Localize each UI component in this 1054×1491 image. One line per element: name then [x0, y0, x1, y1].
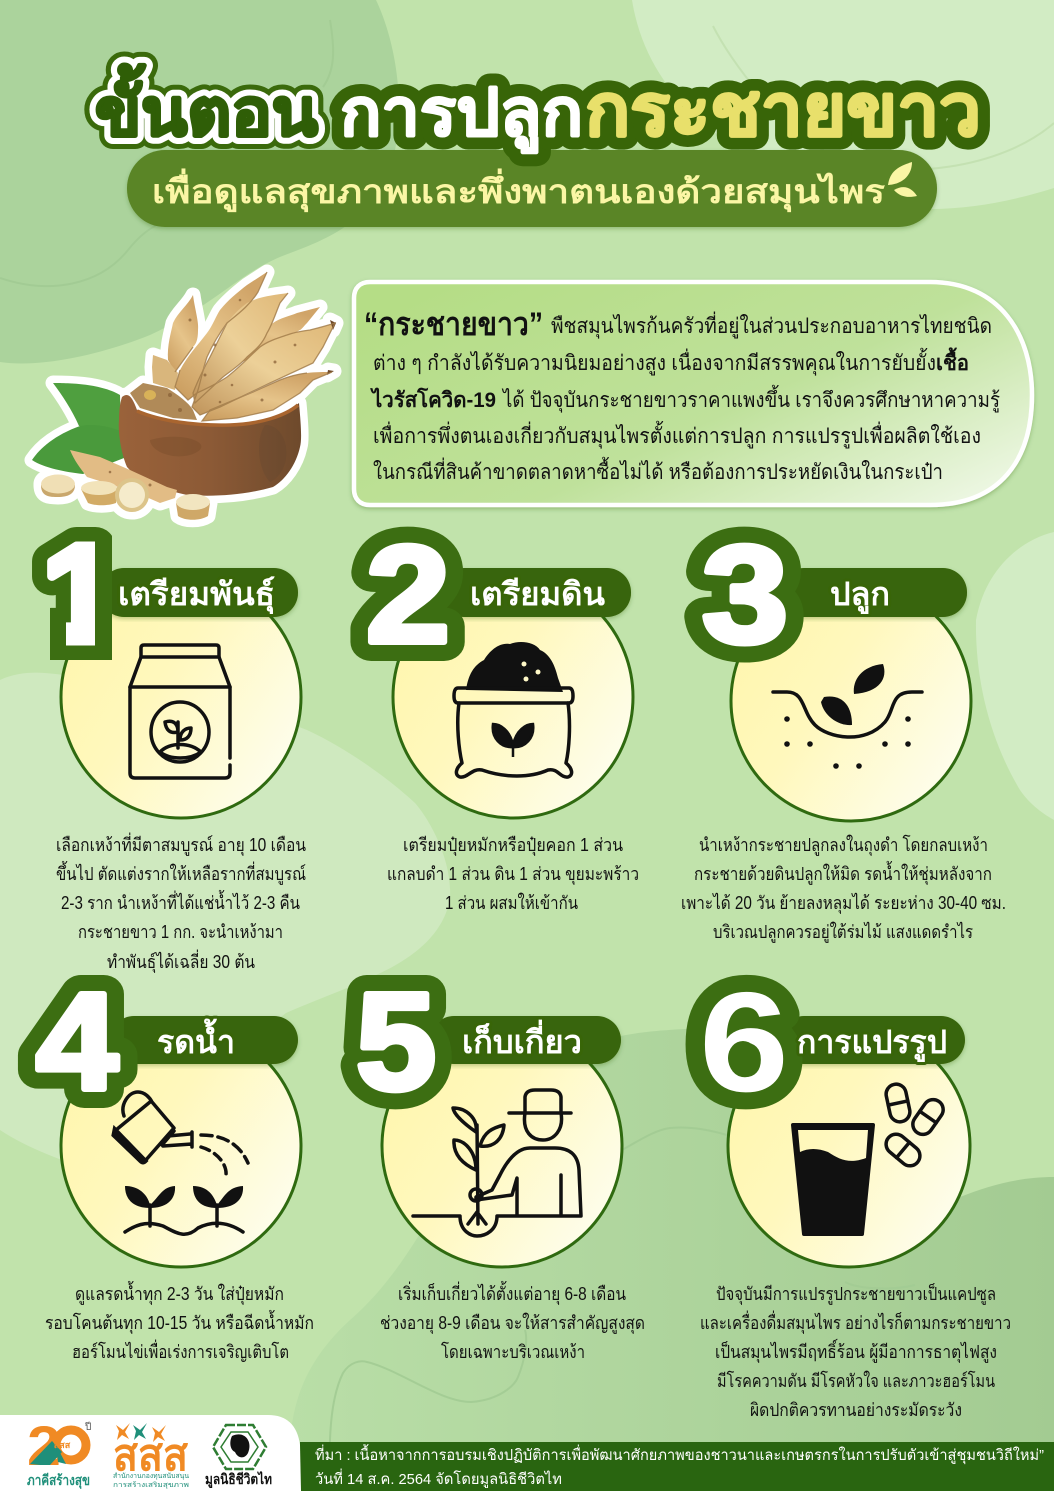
footer: source bar	[300, 1442, 1054, 1491]
body text 6: ปัจจุบันมีการแปรรูปกระชายขาวเป็นแคปซูล	[716, 1282, 996, 1305]
step 6: processing	[699, 963, 1011, 1420]
tuber speckles	[109, 299, 296, 486]
body text 6	[700, 1282, 1011, 1420]
logo: 20 years: สสส	[54, 1440, 71, 1450]
circle 1	[61, 576, 301, 818]
title word: steps: ขั้นตอน	[95, 63, 318, 149]
footer: logo panel	[0, 1414, 301, 1491]
number 4: 4	[36, 965, 118, 1119]
number 2: 2	[366, 518, 450, 672]
bar 3	[780, 568, 967, 617]
logo: 20 years	[27, 1414, 91, 1489]
bowl rim	[137, 405, 298, 425]
bar 2	[440, 568, 631, 617]
body text 4: ฮอร์โมนไข่เพื่อเร่งการเจริญเติบโต	[72, 1339, 289, 1362]
intro text line 4: เพื่อการพึ่งตนเองเกี่ยวกับสมุนไพรตั้งแต่การปลูก การแปรรูปเพื่อผลิตใช้เอง	[373, 421, 981, 449]
body text 3: นำเหง้ากระชายปลูกลงในถุงดำ โดยกลบเหง้า	[699, 834, 988, 856]
number 5: 5	[356, 965, 436, 1119]
body text 5	[380, 1281, 645, 1362]
number 2: 2	[366, 518, 450, 672]
body text 6: ผิดปกติควรทานอย่างระมัดระวัง	[750, 1400, 962, 1420]
bar 6	[780, 1016, 965, 1064]
body text 3	[681, 834, 1006, 943]
background blob: top right	[632, 0, 1054, 209]
number 1: 1	[42, 517, 122, 671]
body text 3: เพาะได้ 20 วัน ย้ายลงหลุมได้ ระยะห่าง 30-40 ซม.	[681, 892, 1006, 914]
background blob: bottom	[289, 1028, 1054, 1491]
background blob: top left	[0, 0, 399, 363]
body text 3: บริเวณปลูกควรอยู่ใต้ร่มไม้ แสงแดดรำไร	[713, 921, 973, 943]
photo: white galangal in wooden bowl	[32, 272, 336, 520]
icon: farmer holding plant	[413, 1090, 581, 1236]
subtitle pill	[127, 150, 937, 227]
bar 5	[430, 1016, 621, 1064]
body text 1: เลือกเหง้าที่มีตาสมบูรณ์ อายุ 10 เดือน	[56, 832, 306, 856]
title outline band: การปลูก	[340, 75, 583, 154]
circle 3	[731, 581, 971, 821]
circle 5	[382, 1025, 622, 1267]
icon: soil sack	[454, 642, 573, 777]
body text 4	[45, 1281, 314, 1362]
body text 1	[56, 832, 306, 973]
bowl shading	[150, 437, 201, 456]
body text 1: กระชายขาว 1 กก. จะนำเหง้ามา	[78, 922, 283, 942]
step 2: prepare soil	[366, 518, 639, 913]
subtitle: เพื่อดูแลสุขภาพและพึ่งพาตนเองด้วยสมุนไพร	[152, 168, 885, 213]
intro text line 5: ในกรณีที่สินค้าขาดตลาดหาซื้อไม่ได้ หรือต้องการประหยัดเงินในกระเป๋า	[373, 457, 943, 484]
icon: seed bag	[130, 645, 230, 778]
panel: introduction	[354, 282, 1032, 505]
heading 1: เตรียมพันธุ์	[118, 576, 275, 615]
source line 1: ที่มา : เนื้อหาจากการอบรมเชิงปฏิบัติการเพื่อพัฒนาศักยภาพของชาวนาและเกษตรกรในการปรับตัวเข้าสู่ชุมชนวิถีใหม่”	[315, 1444, 1044, 1465]
number 3: 3	[702, 518, 788, 672]
circle 6	[728, 1025, 970, 1267]
number 3: 3	[702, 518, 788, 672]
body text 6: มีโรคความดัน มีโรคหัวใจ และภาวะฮอร์โมน	[717, 1370, 995, 1391]
heading 3: ปลูก	[830, 576, 890, 615]
logo: ThaiHealth: สำนักงานกองทุนสนับสนุน	[113, 1472, 189, 1480]
body text 2	[387, 835, 639, 913]
intro text line 1: “กระชายขาว”	[364, 306, 543, 342]
number 4: 4	[36, 965, 118, 1119]
body text 2: 1 ส่วน ผสมให้เข้ากัน	[445, 892, 578, 913]
intro text line 2: เชื้อ	[936, 347, 969, 375]
tuber contours	[175, 272, 335, 421]
body text 1: ทำพันธุ์ได้เฉลี่ย 30 ต้น	[107, 949, 255, 973]
heading 2: เตรียมดิน	[470, 576, 605, 612]
title word: steps: ขั้นตอน	[95, 63, 318, 149]
heading 6: การแปรรูป	[797, 1024, 947, 1063]
circle 2	[393, 576, 633, 818]
panel background	[354, 282, 1032, 505]
number 5: 5	[356, 965, 436, 1119]
logo: Biothai foundation	[205, 1425, 272, 1488]
logo: Biothai foundation: มูลนิธิชีวิตไท	[205, 1470, 272, 1488]
bar 1	[100, 568, 298, 617]
background blob: middle left	[0, 673, 450, 1163]
icon: leaves	[888, 162, 917, 197]
body text 5: เริ่มเก็บเกี่ยวได้ตั้งแต่อายุ 6-8 เดือน	[398, 1281, 626, 1305]
intro text line 1: พืชสมุนไพรก้นครัวที่อยู่ในส่วนประกอบอาหารไทยชนิด	[551, 311, 992, 339]
heading 5: เก็บเกี่ยว	[462, 1019, 582, 1060]
body text 4: ดูแลรดน้ำทุก 2-3 วัน ใส่ปุ๋ยหมัก	[75, 1281, 284, 1305]
logo: ThaiHealth: การสร้างเสริมสุขภาพ	[113, 1481, 189, 1489]
title outline band: กระชายขาว	[585, 71, 981, 151]
number 6: 6	[699, 963, 789, 1122]
step 3: plant	[681, 518, 1006, 943]
logo: ThaiHealth: สสส	[113, 1431, 188, 1480]
logo: 20 years: ปี	[84, 1421, 91, 1433]
title word: steps: ขั้นตอน	[95, 63, 318, 149]
intro text line 3: ได้ ปัจจุบันกระชายขาวราคาแพงขึ้น เราจึงควรศึกษาหาความรู้	[501, 385, 1000, 413]
icon: watering can and seedlings	[114, 1092, 248, 1234]
number 1: 1	[42, 517, 122, 671]
body text 2: แกลบดำ 1 ส่วน ดิน 1 ส่วน ขุยมะพร้าว	[387, 864, 639, 885]
title	[95, 63, 981, 227]
body text 1: 2-3 ราก นำเหง้าที่ได้แช่น้ำไว้ 2-3 คืน	[61, 890, 300, 913]
intro text line 1	[364, 306, 992, 342]
icon: glass and capsules	[791, 1082, 947, 1236]
number 6: 6	[699, 963, 789, 1122]
step 4: water	[36, 965, 314, 1362]
intro text line 2: ต่าง ๆ กำลังได้รับความนิยมอย่างสูง เนื่องจากมีสรรพคุณในการยับยั้ง	[373, 348, 936, 376]
body text 2: เตรียมปุ๋ยหมักหรือปุ๋ยคอก 1 ส่วน	[403, 835, 623, 856]
title outline band	[340, 71, 981, 154]
logo: 20 years: ภาคีสร้างสุข	[27, 1472, 90, 1489]
bar 4	[110, 1016, 298, 1064]
body text 4: รอบโคนต้นทุก 10-15 วัน หรือฉีดน้ำหมัก	[45, 1310, 314, 1334]
source line 2: วันที่ 14 ส.ค. 2564 จัดโดยมูลนิธิชีวิตไท	[315, 1468, 562, 1488]
logo: 20 years: 2	[27, 1414, 61, 1477]
icon: seeds in soil	[773, 664, 922, 769]
body text 3: กระชายด้วยดินปลูกให้มิด รดน้ำให้ชุ่มหลังจาก	[694, 861, 992, 885]
heading 4: รดน้ำ	[157, 1018, 235, 1060]
circle 4	[61, 1025, 301, 1267]
body text 1: ขึ้นไป ตัดแต่งรากให้เหลือรากที่สมบูรณ์	[56, 861, 306, 885]
step 1: prepare seed	[42, 517, 306, 973]
intro text line 3: ไวรัสโควิด-19	[370, 387, 496, 412]
body text 6: เป็นสมุนไพรมีฤทธิ์ร้อน ผู้มีอาการธาตุไฟสูง	[715, 1338, 997, 1363]
body text 5: ช่วงอายุ 8-9 เดือน จะให้สารสำคัญสูงสุด	[380, 1312, 645, 1334]
step 5: harvest	[356, 965, 645, 1362]
background blob: middle right	[976, 532, 1054, 820]
title word: white galangal: กระชายขาว	[585, 71, 981, 151]
title word: planting: การปลูก	[340, 75, 583, 154]
intro text line 3	[370, 385, 1000, 413]
body text 5: โดยเฉพาะบริเวณเหง้า	[441, 1341, 585, 1362]
